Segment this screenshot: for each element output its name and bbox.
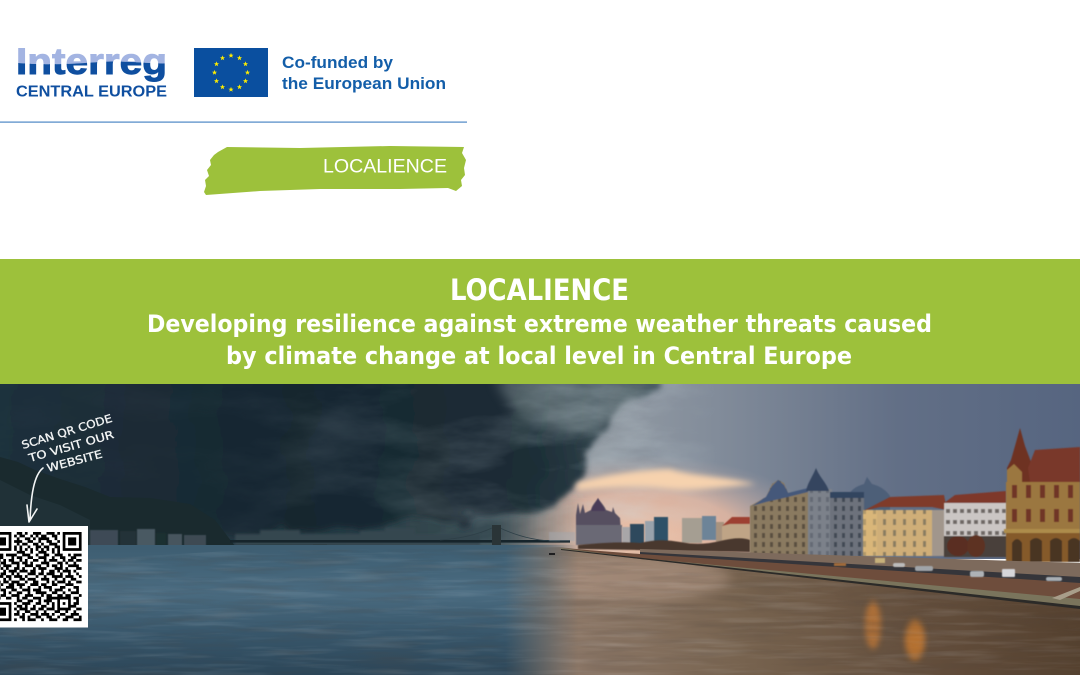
- cars on the road: [834, 558, 1062, 581]
- subtitle: [147, 310, 932, 370]
- callout: scan QR code: TO VISIT OUR: [26, 428, 116, 465]
- project badge: brush stroke with name: [204, 146, 466, 195]
- callout: scan QR code: WEBSITE: [45, 448, 104, 475]
- sunset cloud highlights: [577, 469, 756, 490]
- title band: [0, 259, 1080, 384]
- text: co-funded by the European Union: [282, 54, 446, 93]
- QR code: [0, 526, 88, 628]
- embankment with road: [561, 548, 1080, 609]
- parliament building: [576, 498, 622, 545]
- logo: Interreg Central Europe: CENTRAL EUROPE: [16, 84, 167, 100]
- buildings: white block: [944, 491, 1007, 557]
- logo: Interreg Central Europe: Interreg: [16, 41, 167, 82]
- logo: Interreg Central Europe: [16, 48, 166, 96]
- buildings: ornate grey block: [750, 468, 890, 556]
- storm cloud: [0, 384, 686, 552]
- subtitle: Developing resilience against extreme weather threats caused: [147, 310, 932, 338]
- riverside modern buildings: [622, 516, 750, 545]
- sky: [0, 384, 1080, 568]
- water: [0, 545, 1080, 675]
- bridge tower: [492, 525, 501, 551]
- subtitle: by climate change at local level in Central Europe: [226, 342, 852, 370]
- text: co-funded by the European Union: the European Union: [282, 75, 446, 93]
- tree line along the quay: [578, 538, 750, 552]
- photo: storm over river city: [0, 384, 1080, 675]
- icon: EU flag: [194, 48, 268, 97]
- arrow: [27, 468, 43, 522]
- callout: scan QR code: [20, 412, 116, 522]
- left hill and houses: [0, 457, 240, 559]
- logo: Interreg Central Europe: Interreg: [16, 41, 167, 82]
- text: co-funded by the European Union: Co-funded by: [282, 54, 394, 72]
- header logos: [16, 48, 445, 97]
- buildings: golden block: [863, 495, 947, 556]
- project badge: brush stroke with name: LOCALIENCE: [323, 156, 447, 178]
- callout: scan QR code: SCAN QR CODE: [20, 412, 114, 452]
- buildings: corner palace with spire: [1004, 428, 1080, 562]
- far city and chain bridge: [230, 525, 575, 552]
- heading: LOCALIENCE: [450, 273, 629, 307]
